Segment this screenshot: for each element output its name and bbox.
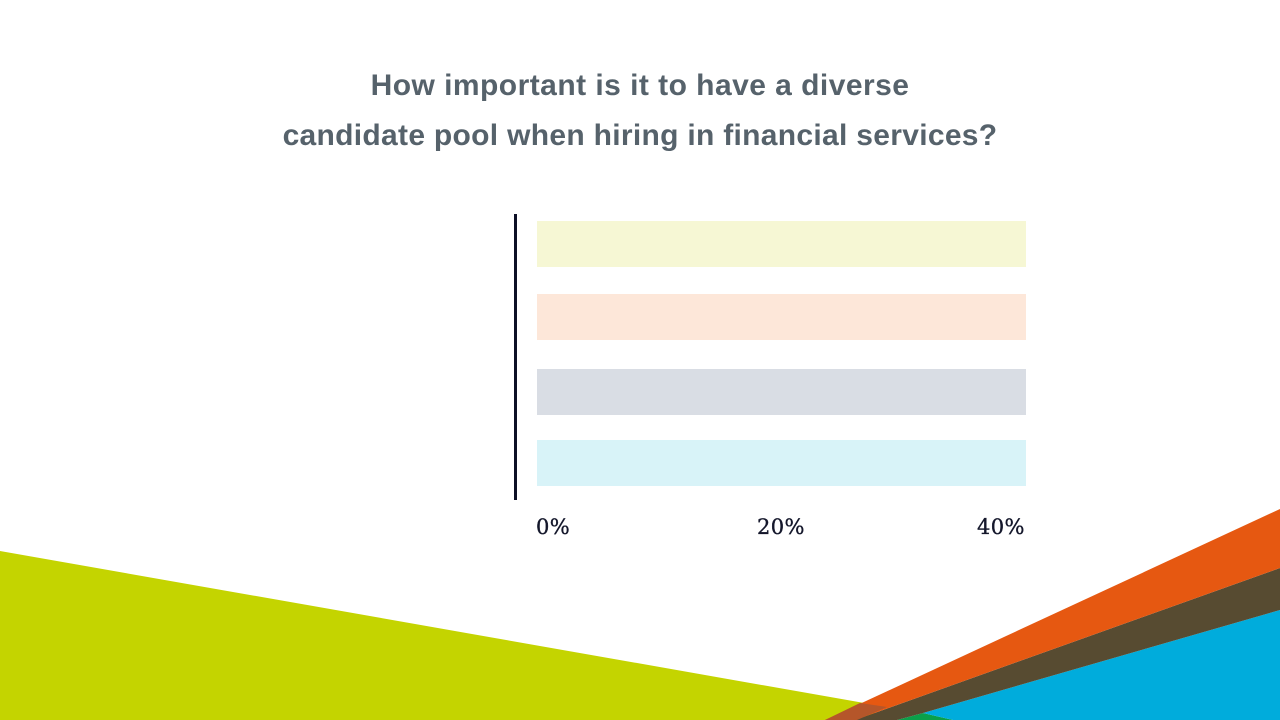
bar: orange	[537, 294, 1026, 340]
shape: lime wedge	[0, 551, 887, 720]
axis line	[514, 214, 517, 500]
title: candidate pool when hiring in financial services?	[283, 119, 997, 152]
shape: orange wedge	[825, 509, 1280, 720]
axis label 40%: 40%	[977, 515, 1025, 539]
shape: blue wedge	[923, 610, 1280, 720]
axis label 0%: 0%	[536, 515, 570, 539]
bar chart	[514, 214, 1026, 539]
title	[283, 69, 997, 152]
shape: brown wedge	[855, 568, 1280, 720]
bar: yellow	[537, 221, 1026, 267]
bar: grey	[537, 369, 1026, 415]
shape: orange lime overlap	[825, 703, 887, 720]
bar: cyan	[537, 440, 1026, 486]
shape: green sliver	[897, 713, 953, 720]
title: How important is it to have a diverse	[371, 69, 909, 102]
axis label 20%: 20%	[757, 515, 805, 539]
